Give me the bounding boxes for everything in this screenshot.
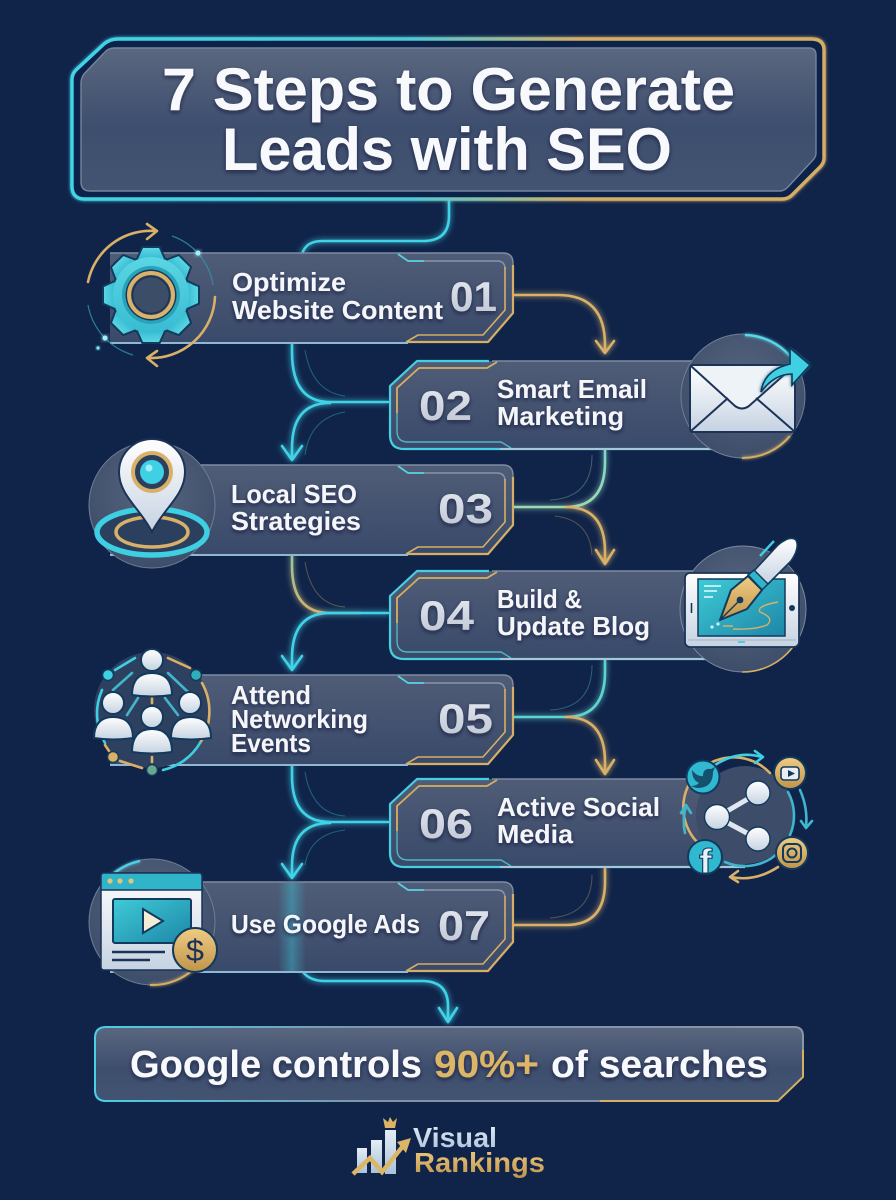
title text — [162, 56, 735, 183]
icon: facebook badge: f — [699, 843, 713, 881]
icon: instagram badge — [776, 837, 808, 869]
icon: video ad browser with coin — [89, 859, 217, 985]
icon: tablet and pen — [680, 538, 806, 672]
step 01 label — [232, 267, 443, 325]
title text: Leads with SEO — [222, 116, 672, 183]
panel: step 03 — [110, 465, 513, 555]
step 01 number: 01 — [450, 273, 497, 320]
step 06 number: 06 — [419, 800, 473, 847]
icon: video badge — [774, 757, 806, 789]
callout text: Google controls — [130, 1044, 422, 1086]
connector: step 02 to step 03 — [513, 449, 605, 507]
step 06 label: Active Social — [497, 792, 660, 822]
icon: video ad browser with coin: $ — [186, 933, 204, 968]
step 04 label: Build & — [497, 584, 582, 614]
icon: social media share — [681, 751, 812, 882]
logo mark — [353, 1117, 411, 1174]
step 06 label: Media — [497, 819, 574, 849]
step 05 number: 05 — [438, 695, 493, 742]
step 04 number: 04 — [419, 592, 475, 639]
step 02 label — [497, 374, 647, 431]
connector: step 07 to footer — [303, 972, 457, 1022]
connector: step 01 to step 02 — [513, 295, 614, 353]
step 04 label: Update Blog — [497, 611, 650, 641]
panel: step 04 — [390, 571, 745, 659]
connector: step 03 to step 04 — [566, 507, 614, 564]
callout text — [130, 1044, 768, 1086]
step 03 label — [231, 479, 361, 536]
step 05 label — [231, 680, 368, 758]
title panel — [72, 39, 824, 199]
step 05 label: Events — [231, 728, 311, 758]
step 03 label: Strategies — [231, 506, 361, 536]
connector: title to step 01 — [302, 198, 449, 254]
connector: step 04 down to step 05 — [513, 660, 605, 717]
step 01 label: Optimize — [232, 267, 346, 297]
panel: step 01 — [110, 253, 513, 343]
step 06 label — [497, 792, 660, 849]
step 07 label: Use Google Ads — [231, 909, 420, 939]
step 01 label: Website Content — [232, 295, 443, 325]
step 02 label: Smart Email — [497, 374, 647, 404]
connector lines — [282, 198, 614, 1022]
step 02 number: 02 — [419, 382, 472, 429]
icon: location pin — [89, 439, 215, 568]
icon: twitter badge — [686, 760, 720, 794]
panel: step 02 — [390, 361, 745, 449]
connector: step 04 to step 05 — [282, 613, 388, 670]
step 03 number: 03 — [438, 485, 493, 532]
connector: step 01 down to step 03 — [282, 343, 388, 460]
title text: 7 Steps to Generate — [162, 56, 735, 123]
panel: step 06 — [390, 779, 745, 867]
panel: step 05 — [110, 675, 513, 765]
logo: Visual Rankings — [353, 1117, 545, 1178]
panel: step 07 — [110, 882, 513, 972]
step 03 label: Local SEO — [231, 479, 357, 509]
logo: Visual Rankings: Visual — [413, 1122, 497, 1153]
callout text: of searches — [551, 1044, 768, 1086]
step 07 number: 07 — [438, 902, 490, 949]
step 05 label: Attend — [231, 680, 311, 710]
footer callout — [95, 1027, 803, 1101]
connector: step 06 to step 07 — [513, 867, 605, 925]
callout text: 90%+ — [434, 1044, 539, 1086]
connector: step 05 down to step 07 — [282, 765, 388, 878]
connector: step 05 to step 06 — [566, 717, 614, 774]
icon: gear with rotating arrows — [88, 224, 215, 366]
icon: envelope with arrow — [681, 334, 810, 458]
connector: step 03 down to step 04 — [292, 555, 360, 613]
step 02 label: Marketing — [497, 401, 624, 431]
step 04 label — [497, 584, 650, 641]
logo: Visual Rankings: Rankings — [414, 1147, 545, 1178]
step 05 label: Networking — [231, 704, 368, 734]
icon: networking people — [94, 649, 211, 776]
